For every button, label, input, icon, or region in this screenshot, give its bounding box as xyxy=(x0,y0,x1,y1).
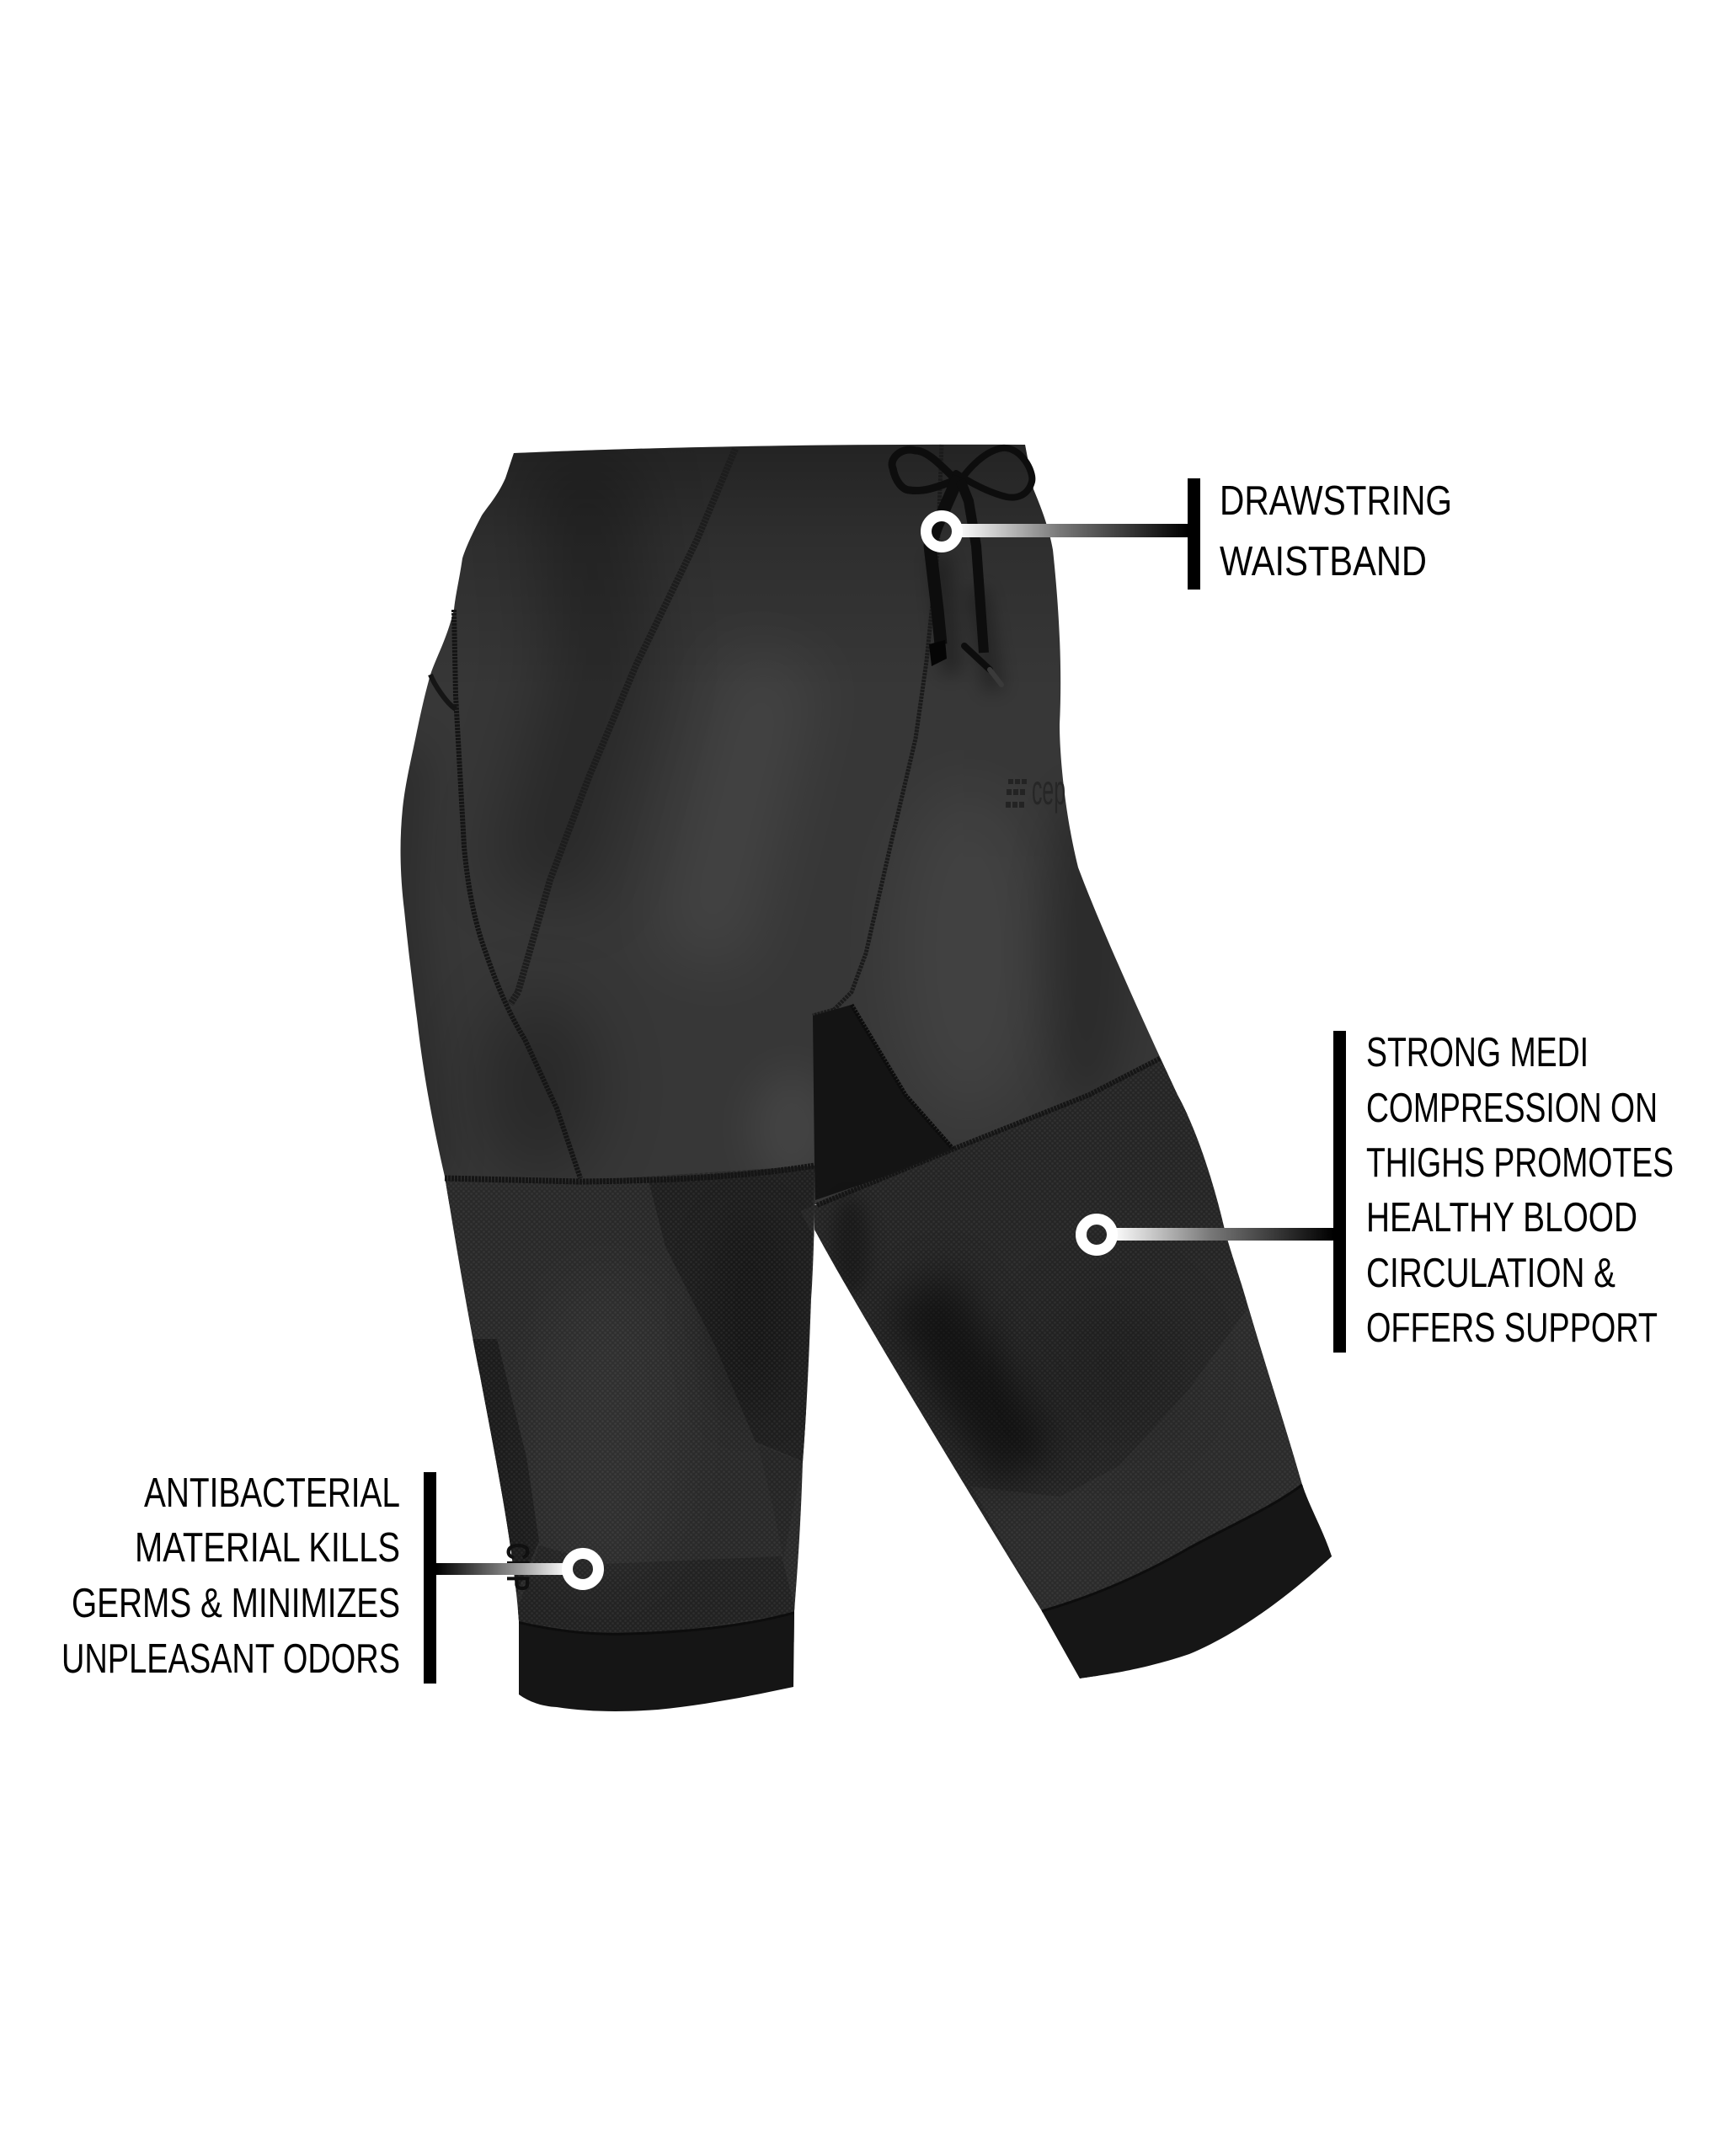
label: HEALTHY BLOOD xyxy=(1366,1195,1637,1241)
bracket bar xyxy=(1333,1031,1346,1353)
label xyxy=(61,1470,400,1682)
drawstring shadow xyxy=(939,556,994,691)
label: ANTIBACTERIAL xyxy=(144,1470,400,1516)
right cuff xyxy=(1043,1485,1332,1678)
label: GERMS & MINIMIZES xyxy=(72,1581,400,1626)
label xyxy=(1366,1030,1674,1351)
bracket bar xyxy=(424,1472,436,1684)
darker inner knit panel xyxy=(649,1166,814,1462)
left leg mesh xyxy=(438,1166,821,1718)
gusset seam xyxy=(852,1005,956,1152)
marker xyxy=(927,515,957,547)
bracket bar xyxy=(1188,478,1200,590)
inner gusset xyxy=(813,1005,956,1200)
lower knit band xyxy=(517,1607,795,1621)
label: CIRCULATION & xyxy=(1366,1251,1616,1296)
label: MATERIAL KILLS xyxy=(135,1525,400,1571)
seam: center front xyxy=(813,445,942,1016)
connector line xyxy=(1114,1228,1333,1241)
shorts upper fabric xyxy=(387,430,1188,1204)
seam: side panel xyxy=(454,610,580,1178)
lower inner strip xyxy=(802,1462,803,1464)
right leg mesh xyxy=(814,1056,1332,1678)
label: STRONG MEDI xyxy=(1366,1030,1589,1075)
connector line xyxy=(959,524,1188,537)
logo: embossed brand mark xyxy=(1006,766,1065,814)
label: DRAWSTRING xyxy=(1220,478,1452,524)
callout: thigh compression xyxy=(1081,1030,1674,1353)
infographic: product with feature callouts xyxy=(64,445,1673,1711)
drawstring bow xyxy=(892,448,1032,685)
product: compression shorts xyxy=(387,430,1381,1718)
marker xyxy=(1081,1219,1112,1250)
pocket edge xyxy=(430,675,456,709)
seam above right mesh xyxy=(817,1049,1179,1205)
callout: drawstring waistband xyxy=(927,478,1452,590)
product: compression shorts: cep xyxy=(1032,766,1065,814)
seam: hip panel xyxy=(510,449,735,1004)
connector line xyxy=(436,1563,567,1575)
waist seam left xyxy=(445,1166,814,1182)
aglet xyxy=(929,640,947,666)
left cuff xyxy=(519,1614,794,1711)
callout: antibacterial material xyxy=(61,1470,598,1684)
label xyxy=(1220,478,1452,584)
label: WAISTBAND xyxy=(1220,539,1427,584)
seam top of right cuff xyxy=(1042,1485,1302,1611)
marker xyxy=(568,1553,598,1585)
outer dark strip xyxy=(472,1339,539,1600)
logo: mesh leg brand mark: CEP xyxy=(499,1543,535,1591)
label: UNPLEASANT ODORS xyxy=(61,1636,400,1682)
